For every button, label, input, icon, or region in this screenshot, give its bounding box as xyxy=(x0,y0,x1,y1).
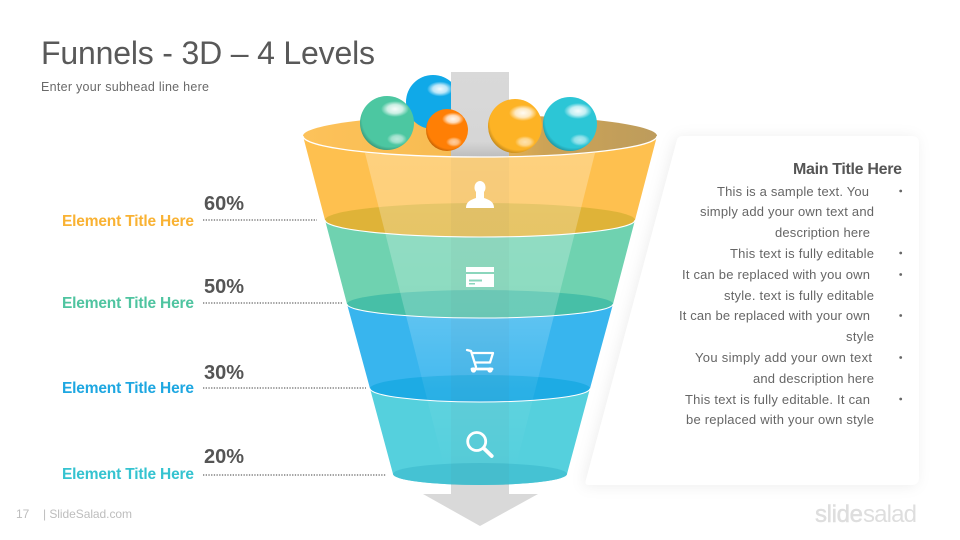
ball: teal xyxy=(543,97,597,151)
card heading: Main Title Here xyxy=(793,161,902,178)
level 3 inner ellipse xyxy=(370,375,590,402)
level 1 inner ellipse xyxy=(325,203,635,237)
card bullet list xyxy=(679,184,902,427)
label row: level 3: Element Title Here xyxy=(62,380,194,397)
card bullet list: description here xyxy=(775,225,870,240)
label row: level 1 xyxy=(62,193,317,230)
label row: level 3 xyxy=(62,362,366,397)
label row: level 4 xyxy=(62,446,386,483)
label row: level 4: Element Title Here xyxy=(62,466,194,483)
arrow shaft seen through funnel xyxy=(451,157,509,485)
title: Funnels - 3D – 4 Levels xyxy=(41,35,375,71)
footer page number: 17 xyxy=(16,507,30,521)
funnel level 3 xyxy=(347,304,613,402)
label row: level 4: 20% xyxy=(204,446,244,468)
logo wordmark: slide xyxy=(815,501,863,528)
logo wordmark xyxy=(815,501,917,528)
label row: level 1: Element Title Here xyxy=(62,213,194,230)
rim highlights xyxy=(303,136,657,402)
icon: shopping cart xyxy=(467,350,493,372)
level 2 inner ellipse xyxy=(347,290,613,318)
funnel rim xyxy=(303,115,657,157)
icon: person xyxy=(466,181,494,208)
level 4 inner ellipse xyxy=(393,463,567,485)
card bullet list: This text is fully editable. It can xyxy=(685,392,870,407)
funnel level 4 xyxy=(370,388,590,485)
card bullet list: style. text is fully editable xyxy=(724,288,874,303)
icon: magnifier xyxy=(468,432,492,456)
card bullet list: This text is fully editable xyxy=(730,246,874,261)
card bullet list: This is a sample text. You xyxy=(717,184,869,199)
card bullet list: style xyxy=(846,329,874,344)
footer site name: | SlideSalad.com xyxy=(43,507,132,521)
icon: card xyxy=(466,267,494,287)
panel: text card xyxy=(586,136,919,485)
label row: level 1: 60% xyxy=(204,193,244,215)
funnel light beam xyxy=(365,153,595,470)
logo wordmark: salad xyxy=(863,501,917,528)
label row: level 2: 50% xyxy=(204,276,244,298)
subhead: Enter your subhead line here xyxy=(41,80,209,94)
label row: level 2 xyxy=(62,276,342,312)
card bullet list: simply add your own text and xyxy=(700,204,874,219)
arrow: upper shaft xyxy=(451,72,509,157)
card bullet list: It can be replaced with you own xyxy=(682,267,870,282)
funnel level 1 xyxy=(303,136,657,237)
arrow: lower tip xyxy=(423,480,538,526)
label row: level 2: Element Title Here xyxy=(62,295,194,312)
ball: blue xyxy=(406,75,460,129)
card bullet list: You simply add your own text xyxy=(695,350,872,365)
ball: yellow xyxy=(488,99,542,153)
label row: level 3: 30% xyxy=(204,362,244,384)
card bullet list: and description here xyxy=(753,371,874,386)
card bullet list: It can be replaced with your own xyxy=(679,308,870,323)
ball: orange xyxy=(426,109,468,151)
ball: green xyxy=(360,96,414,150)
card bullet list: be replaced with your own style xyxy=(686,412,874,427)
funnel level 2 xyxy=(325,220,635,318)
